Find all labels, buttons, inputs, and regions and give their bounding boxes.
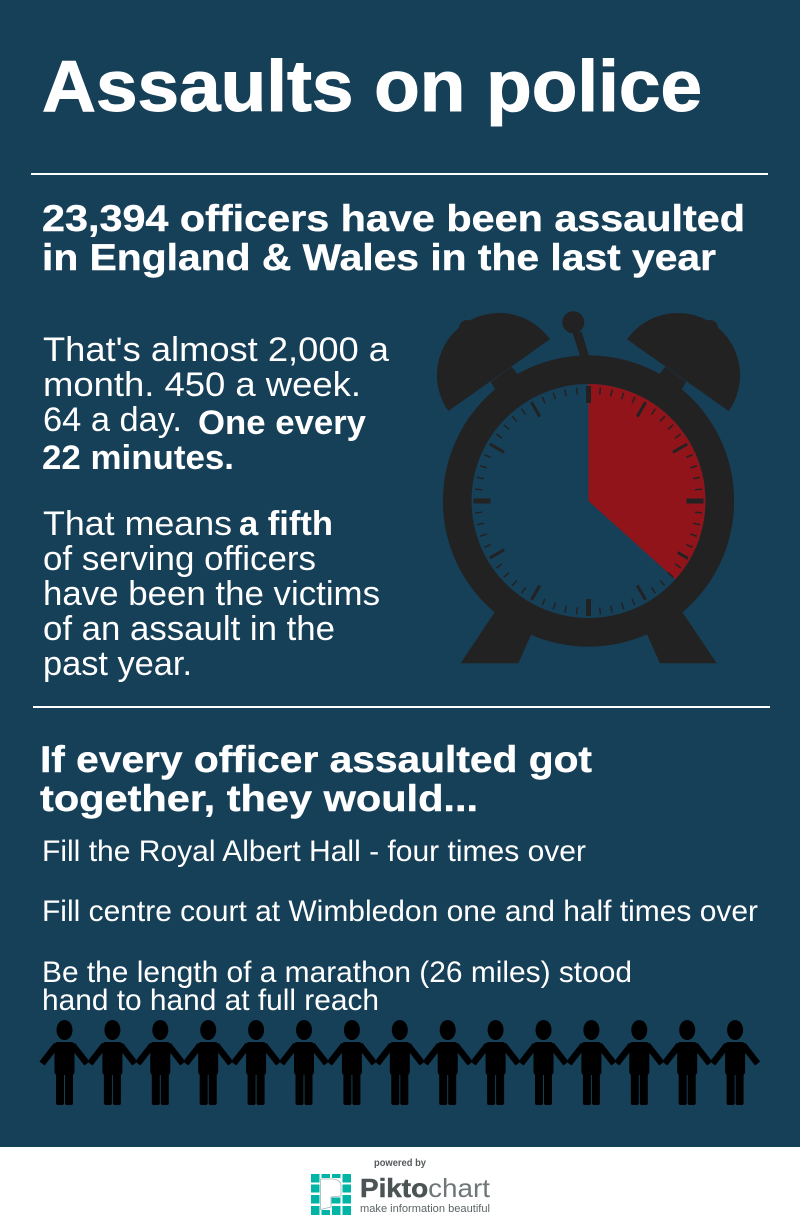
icon: Piktochart logo	[311, 1174, 351, 1215]
clock tick marks	[474, 386, 704, 616]
text block: a fifth of officers: That means	[43, 505, 232, 543]
heading: officers assaulted	[42, 198, 745, 278]
heading: officers assaulted: 23,394 officers have been assaulted	[42, 198, 745, 239]
text block: assault frequency: 64 a day.	[43, 401, 182, 439]
text block: comparisons	[42, 835, 758, 1017]
text block: a fifth of officers: have been the victims	[43, 575, 380, 613]
text block: a fifth of officers	[43, 505, 380, 683]
text block: comparisons: Fill centre court at Wimbledon one and half times over	[42, 895, 758, 928]
text block: assault frequency: month. 450 a week.	[43, 366, 361, 404]
heading: if every officer	[40, 739, 592, 819]
text block: a fifth of officers: of an assault in the	[43, 610, 335, 648]
text block: a fifth of officers: a fifth	[239, 505, 333, 543]
text block: assault frequency	[42, 331, 389, 477]
title: Assaults on police	[42, 47, 702, 127]
heading: if every officer: together, they would...	[40, 778, 478, 819]
text block: a fifth of officers: past year.	[43, 645, 192, 683]
heading: officers assaulted: in England & Wales in the last year	[42, 237, 716, 278]
Piktochart wordmark: Piktochart	[360, 1173, 491, 1203]
powered by label: powered by	[374, 1158, 426, 1169]
text block: a fifth of officers: of serving officers	[43, 540, 316, 578]
footer: Piktochart branding	[0, 1147, 800, 1227]
red elapsed wedge	[588, 384, 705, 579]
text block: assault frequency: That's almost 2,000 a	[43, 331, 389, 369]
icon: row of people holding hands	[42, 1020, 758, 1105]
tagline: make information beautiful	[360, 1203, 490, 1215]
text block: comparisons: Be the length of a marathon (26 miles) stood	[42, 956, 632, 989]
heading: if every officer: If every officer assaulted got	[40, 739, 592, 780]
text block: comparisons: Fill the Royal Albert Hall - four times over	[42, 835, 586, 868]
text block: comparisons: hand to hand at full reach	[42, 984, 379, 1017]
icon: alarm clock	[437, 311, 740, 663]
text block: assault frequency: One every	[198, 404, 366, 442]
text block: assault frequency: 22 minutes.	[42, 439, 234, 477]
